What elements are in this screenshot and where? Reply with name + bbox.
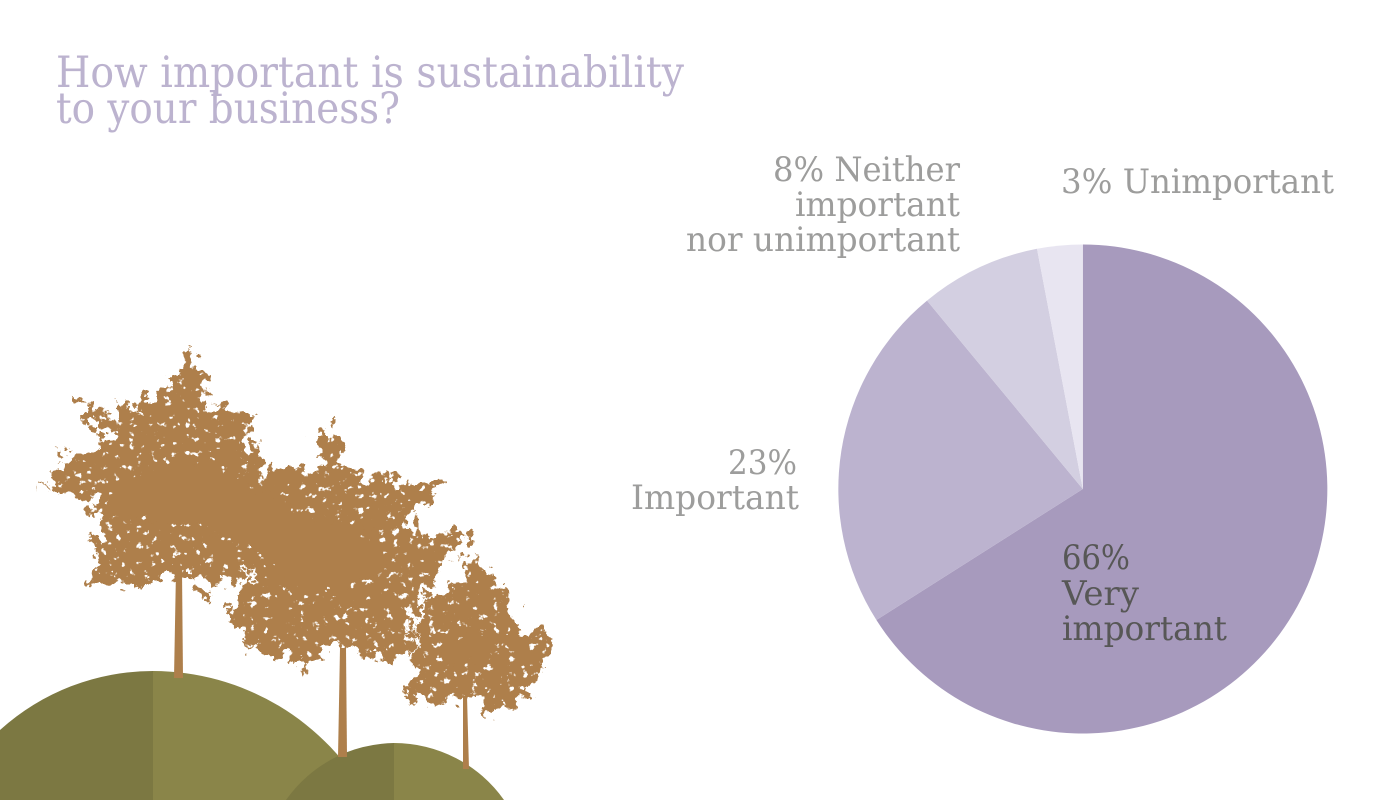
foliage outlines with leaf gaps [36, 350, 553, 718]
slice: 3% unimportant [1037, 244, 1083, 489]
label: 8% neither important nor unimportant: important [795, 185, 960, 225]
label: 8% neither important nor unimportant: 8% Neither [773, 150, 961, 190]
slice: 66% very important [876, 244, 1327, 733]
label: 23% important: Important [631, 478, 799, 518]
label: 66% very important: important [1062, 609, 1227, 649]
label: 66% very important: 66% [1062, 538, 1130, 578]
illustration: large hill [0, 671, 369, 800]
slice: 8% neither [927, 249, 1083, 489]
illustration: small hill [286, 743, 504, 800]
tree 3 crown [404, 554, 553, 718]
label: 8% neither important nor unimportant [686, 150, 961, 260]
illustration: tree foliage [36, 350, 553, 718]
label: 8% neither important nor unimportant: nor unimportant [686, 220, 960, 260]
label: 23% important [631, 443, 799, 518]
illustration: tree trunks [174, 570, 469, 769]
pie chart [838, 244, 1327, 734]
label: 66% very important [1061, 538, 1227, 649]
solid foliage cores [110, 455, 500, 665]
label: 23% important: 23% [728, 443, 797, 483]
label: 3% unimportant: 3% Unimportant [1061, 162, 1334, 202]
title: to your business? [56, 84, 400, 134]
label: 66% very important: Very [1061, 574, 1140, 614]
title [56, 48, 685, 134]
tree 2 crown [226, 420, 467, 674]
slice: 23% important [838, 301, 1083, 620]
tree 1 crown [36, 350, 280, 598]
title: How important is sustainability [56, 48, 685, 98]
